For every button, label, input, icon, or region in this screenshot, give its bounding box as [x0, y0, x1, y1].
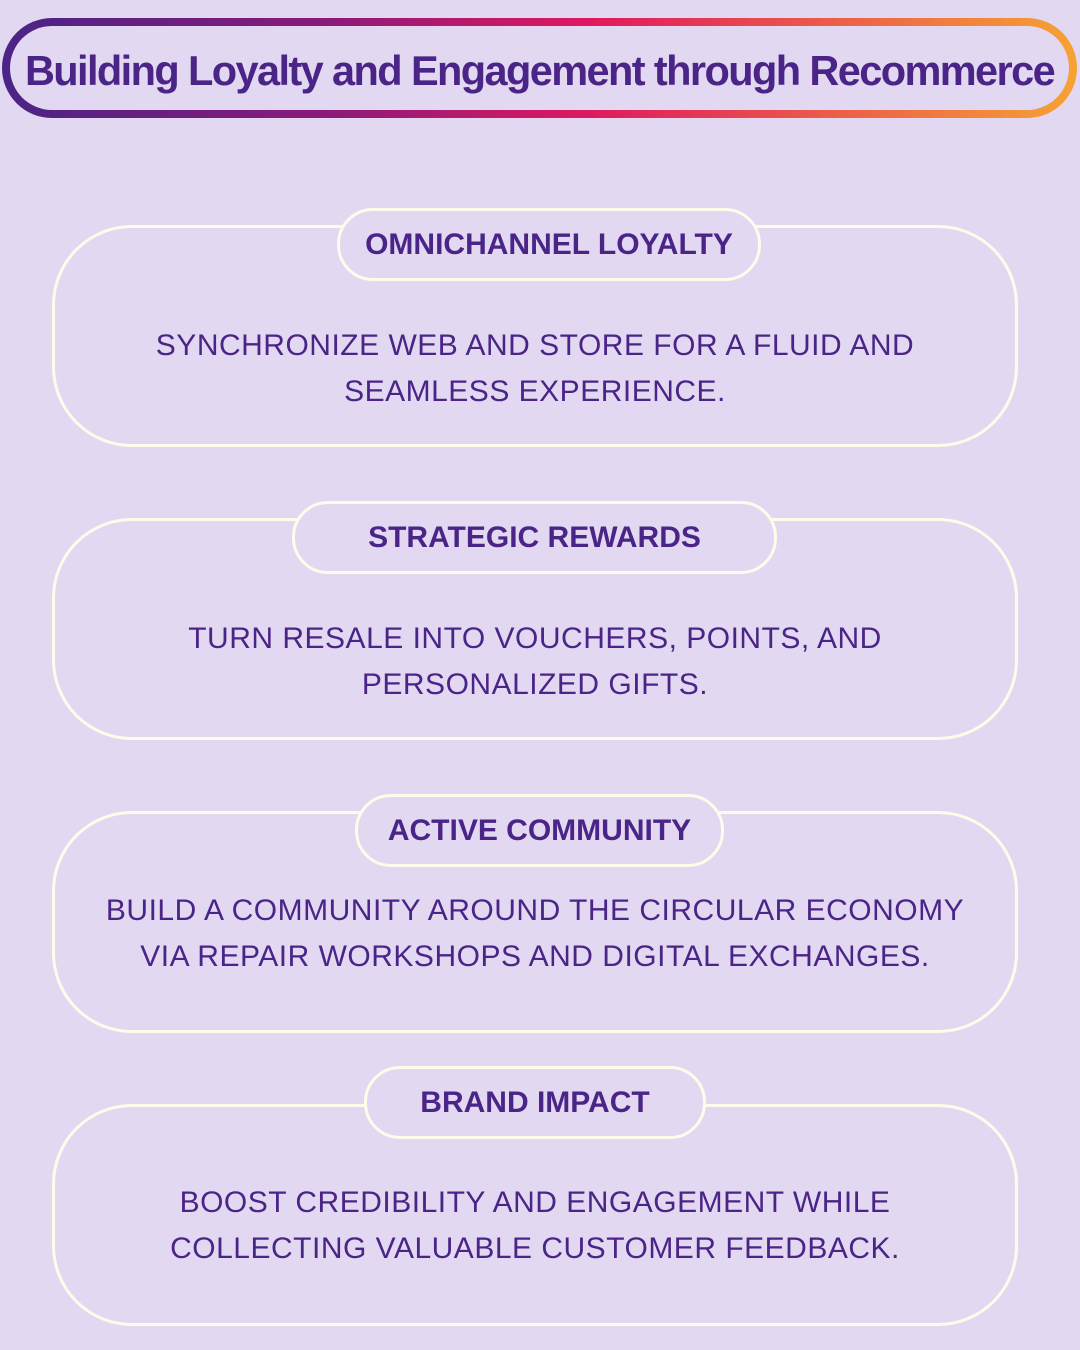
- text: omnichannel: [156, 329, 914, 408]
- text: community: [106, 894, 964, 973]
- text: community: BUILD A COMMUNITY AROUND THE CIRCULAR ECONOMY: [106, 894, 964, 927]
- text: brand impact: COLLECTING VALUABLE CUSTOMER FEEDBACK.: [170, 1232, 900, 1265]
- panel: strategic rewards: [52, 518, 1018, 740]
- text: brand impact: [170, 1186, 900, 1265]
- pill: omnichannel loyalty: [337, 208, 761, 281]
- panel: brand impact: [52, 1104, 1018, 1326]
- text: brand impact: BOOST CREDIBILITY AND ENGAGEMENT WHILE: [180, 1186, 890, 1219]
- text: rewards: [188, 622, 882, 701]
- pill: active community: [355, 794, 724, 867]
- text: community: VIA REPAIR WORKSHOPS AND DIGITAL EXCHANGES.: [140, 940, 930, 973]
- title: [2, 18, 1077, 118]
- pill: brand impact: [364, 1066, 706, 1139]
- text: rewards: TURN RESALE INTO VOUCHERS, POINTS, AND: [188, 622, 882, 655]
- text: omnichannel: SEAMLESS EXPERIENCE.: [344, 375, 726, 408]
- pill: strategic rewards: [292, 501, 777, 574]
- pill: active community: ACTIVE COMMUNITY: [388, 814, 691, 846]
- panel: active community: [52, 811, 1018, 1033]
- title: Building Loyalty and Engagement through Recommerce: [25, 47, 1054, 94]
- pill: strategic rewards: STRATEGIC REWARDS: [368, 520, 701, 554]
- pill: brand impact: BRAND IMPACT: [420, 1086, 650, 1118]
- text: omnichannel: SYNCHRONIZE WEB AND STORE FOR A FLUID AND: [156, 329, 914, 362]
- pill: omnichannel loyalty: OMNICHANNEL LOYALTY: [365, 228, 733, 260]
- panel: omnichannel loyalty: [52, 225, 1018, 447]
- text: rewards: PERSONALIZED GIFTS.: [362, 668, 708, 701]
